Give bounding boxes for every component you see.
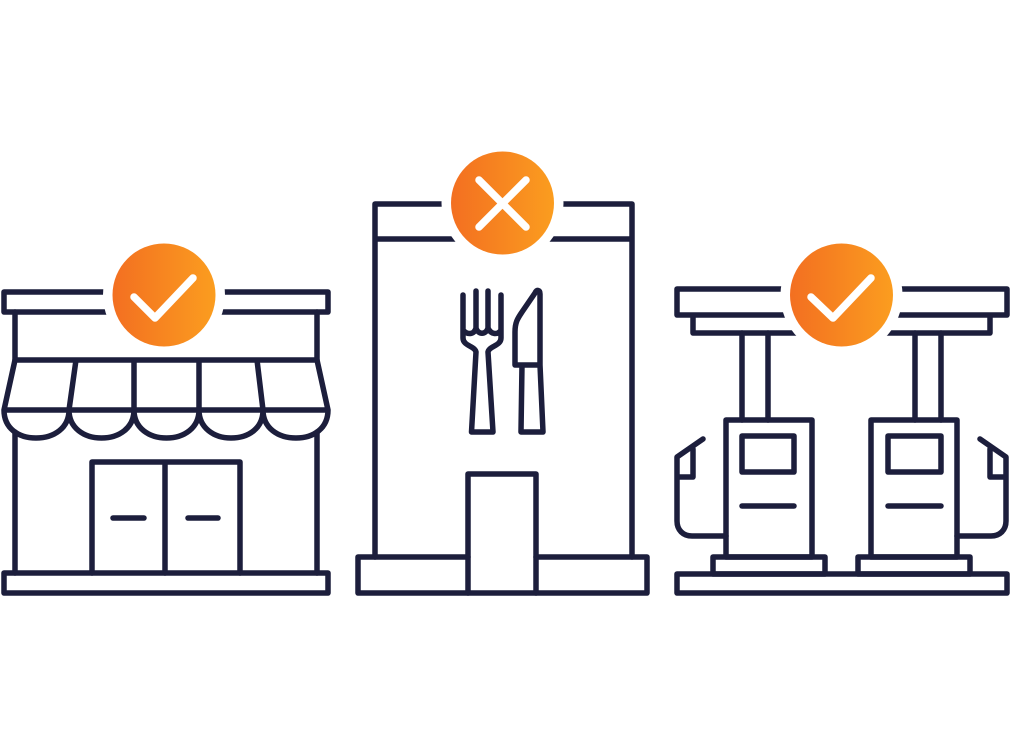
canopy columns bbox=[742, 333, 941, 420]
restaurant door bbox=[468, 474, 536, 593]
icon: check badge bbox=[780, 234, 902, 356]
panel: restaurant (not allowed) bbox=[358, 142, 647, 593]
left hose and nozzle bbox=[677, 439, 726, 536]
restaurant base bbox=[358, 557, 647, 593]
right hose and nozzle bbox=[957, 439, 1006, 536]
right fuel pump bbox=[858, 420, 970, 574]
store walls bbox=[15, 312, 317, 573]
icon: check badge bbox=[103, 234, 225, 356]
gas station base bbox=[677, 574, 1007, 593]
panel: convenience store (allowed) bbox=[4, 234, 328, 593]
panel: gas station (allowed) bbox=[677, 234, 1007, 593]
store roof sign bbox=[4, 292, 328, 312]
store base bbox=[4, 573, 328, 593]
store awning bbox=[4, 360, 328, 438]
icon: cross badge bbox=[442, 142, 564, 264]
icon: fork bbox=[463, 291, 501, 432]
store double door bbox=[92, 462, 240, 573]
icon: knife bbox=[515, 290, 543, 432]
left fuel pump bbox=[713, 420, 825, 574]
gas station canopy bbox=[677, 289, 1007, 333]
restaurant building outline bbox=[375, 204, 632, 557]
